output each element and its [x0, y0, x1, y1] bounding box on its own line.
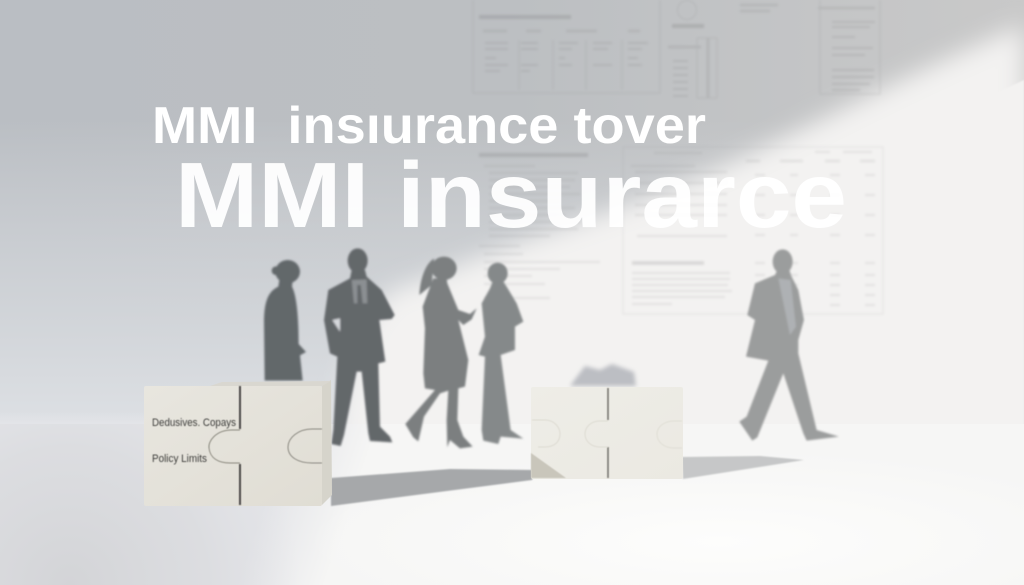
- label: deductibles and copays: Dedusives. Copays: [152, 417, 236, 429]
- puzzle front face: [531, 387, 683, 479]
- document panel: upper wall chart: [473, 0, 880, 98]
- document panel: lower wall summary: [479, 147, 883, 314]
- floor: [0, 412, 1024, 585]
- silhouette: person with crossed arms: [479, 263, 523, 444]
- puzzle side and top: [322, 380, 332, 505]
- silhouette: woman with bun: [264, 260, 306, 381]
- puzzle front face: [144, 386, 322, 506]
- cast shadow: left puzzle: [331, 469, 535, 506]
- silhouette: man in suit: [324, 248, 395, 446]
- cast shadow: right puzzle: [682, 456, 804, 479]
- silhouette: man walking: [739, 249, 839, 441]
- title line two: MMI insurarce: [175, 143, 847, 247]
- shadow behind right puzzle: [570, 364, 636, 386]
- puzzle: left pair with labels: [144, 380, 332, 506]
- puzzle corner shadow: [531, 453, 566, 478]
- label: policy limits: Policy Limits: [152, 453, 207, 465]
- puzzle seam and tabs: [209, 386, 322, 505]
- main title: [152, 97, 847, 247]
- silhouette: woman walking with tablet: [405, 257, 477, 448]
- puzzle seam and tabs: [532, 388, 682, 478]
- silhouette group: standing people: [264, 248, 523, 448]
- puzzle: right pair: [531, 387, 683, 479]
- title line one: MMI insıurance tover: [152, 97, 706, 155]
- light beam on wall: [340, 26, 1024, 470]
